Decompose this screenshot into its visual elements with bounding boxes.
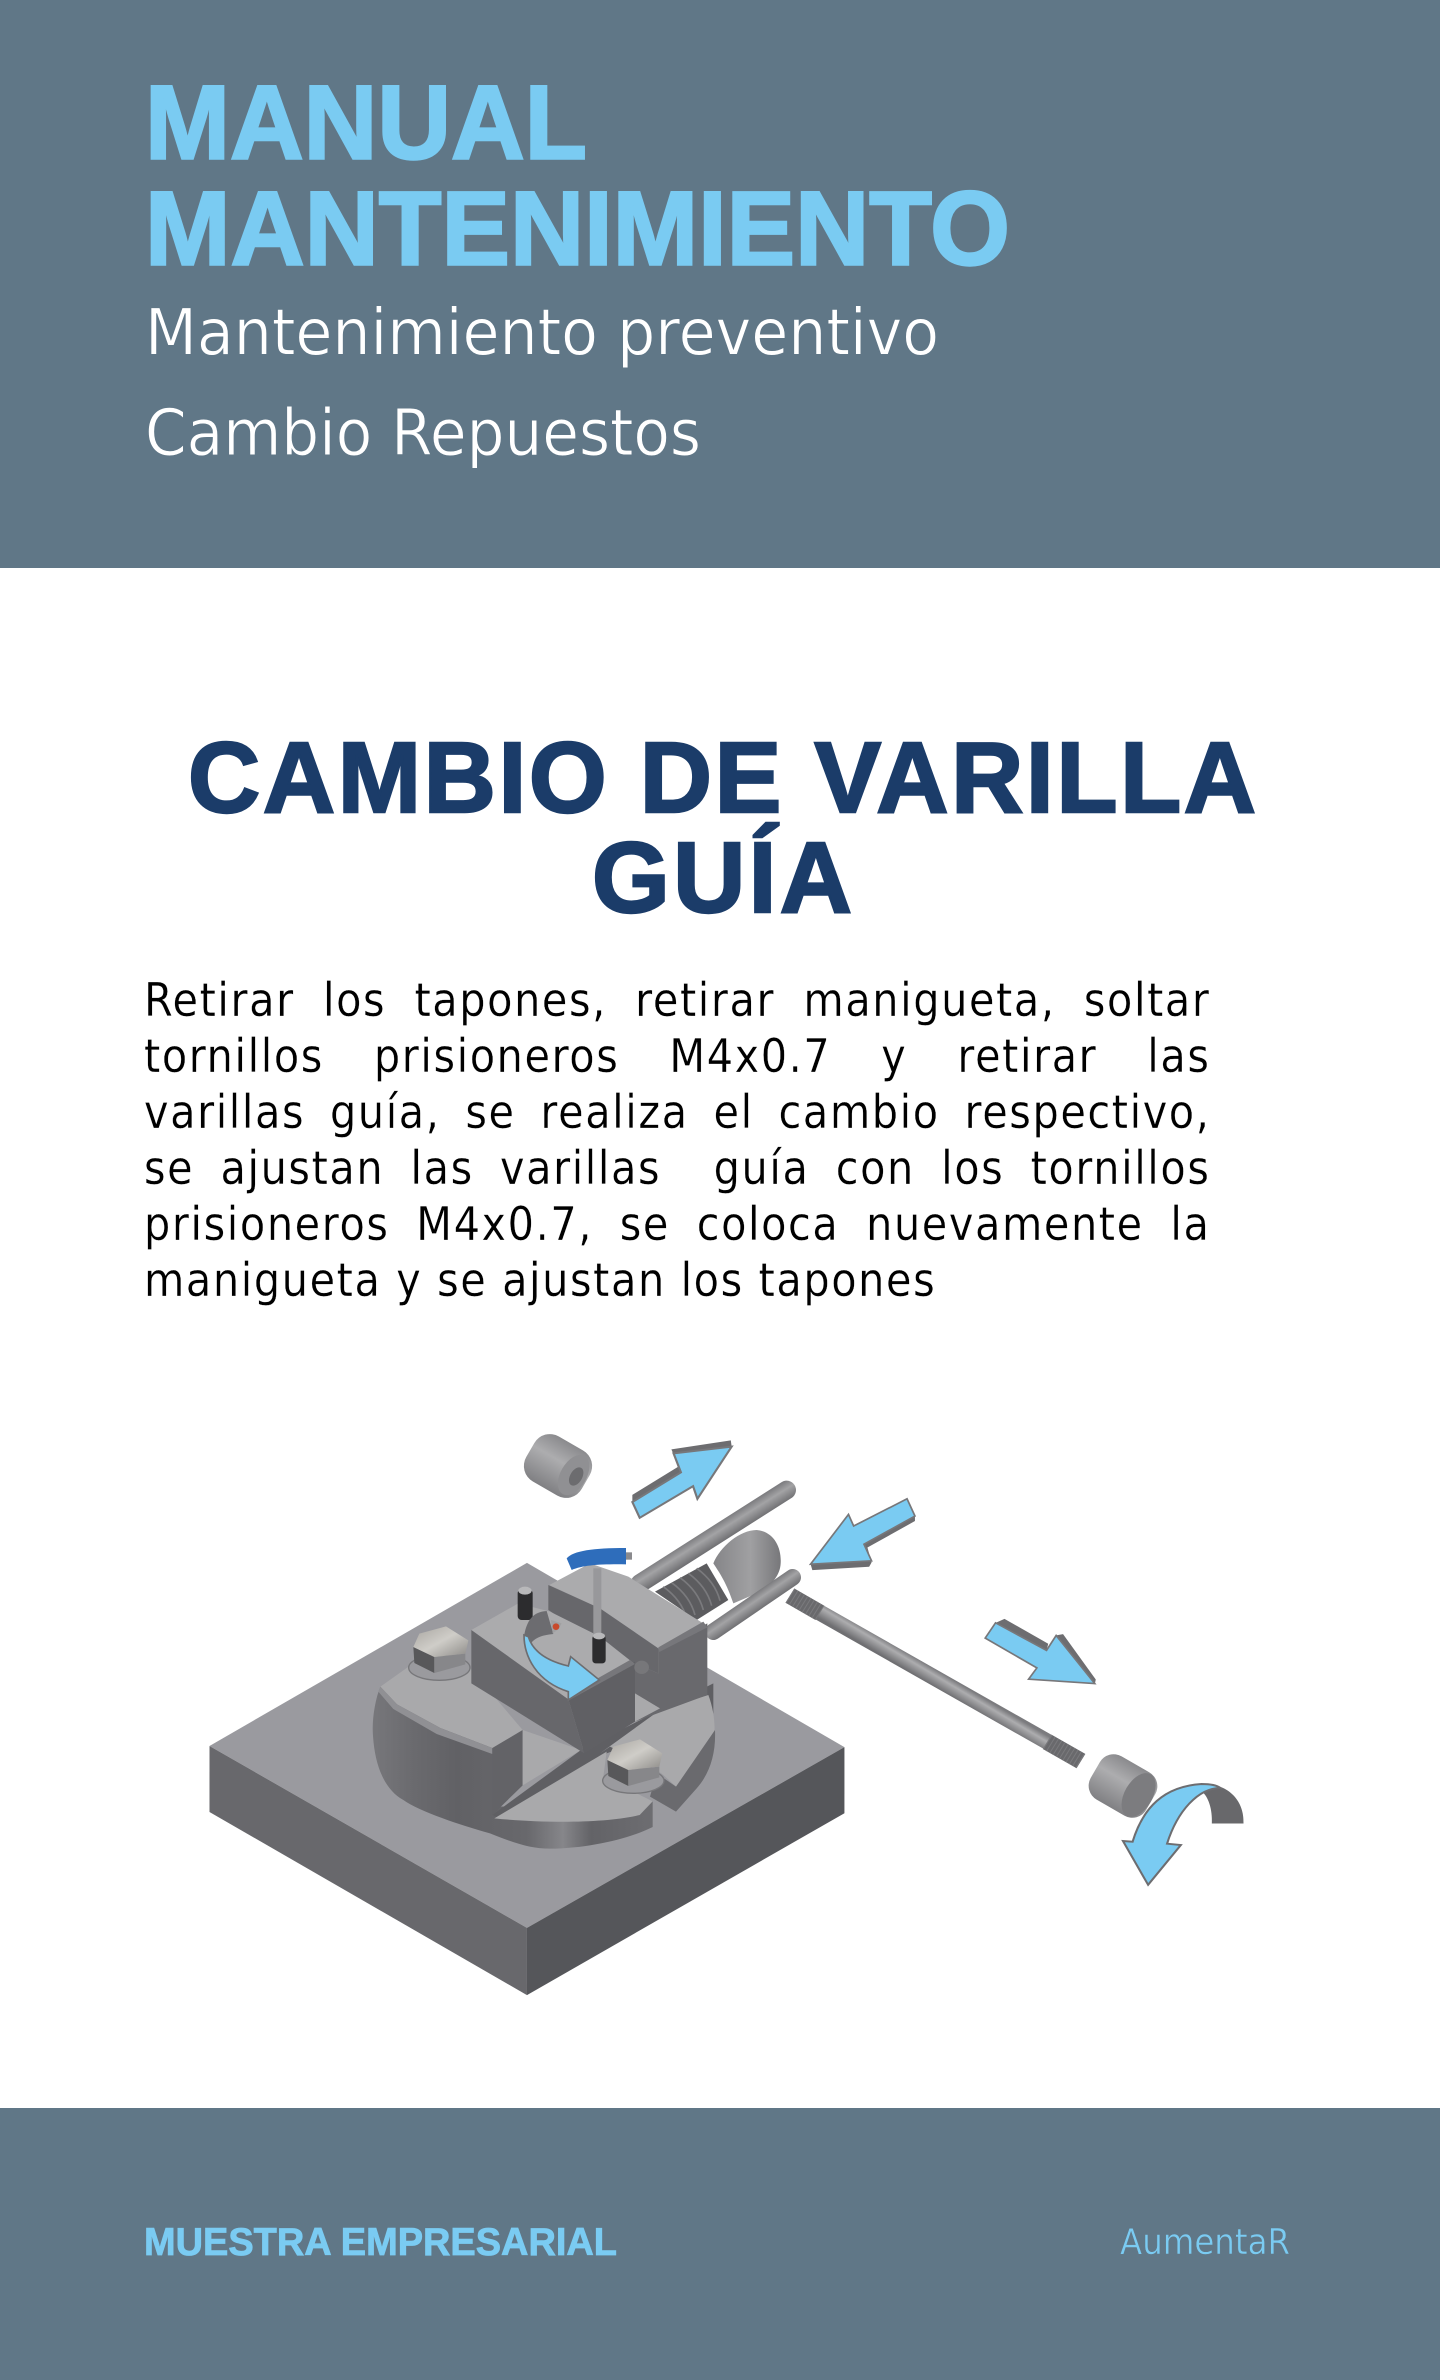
- nut: [713, 1530, 781, 1603]
- illustration: vise with guide rod: [209, 1427, 1244, 1995]
- section heading: [188, 722, 1256, 934]
- arrow: pointing outward: [985, 1619, 1096, 1685]
- threaded spindle: [655, 1563, 728, 1620]
- section heading: GUÍA: [592, 822, 852, 934]
- title: MANUAL: [145, 64, 587, 182]
- section heading: CAMBIO DE VARILLA: [188, 722, 1256, 834]
- body paragraph: Retirar los tapones, retirar manigueta, soltar: [144, 972, 1210, 1026]
- T-handle wrench: [567, 1548, 632, 1635]
- lower cap: [1083, 1748, 1163, 1824]
- fixed jaw: [548, 1563, 707, 1722]
- upper cap: [517, 1427, 599, 1505]
- long guide rod: [790, 1596, 1081, 1761]
- title: [145, 64, 1010, 288]
- bolt 1: [409, 1626, 470, 1680]
- body paragraph: manigueta y se ajustan los tapones: [144, 1252, 936, 1306]
- body paragraph: prisioneros M4x0.7, se coloca nuevamente la: [144, 1196, 1210, 1250]
- curved arrow: [1123, 1784, 1244, 1885]
- footer left label: MUESTRA EMPRESARIAL: [144, 2221, 617, 2264]
- vise assembly: [373, 1490, 793, 1849]
- right-hand arrows: [811, 1499, 1244, 1885]
- subtitle: [145, 296, 939, 471]
- moving jaw: [471, 1603, 649, 1753]
- subtitle: Cambio Repuestos: [145, 397, 701, 471]
- body paragraph: se ajustan las varillas guía con los tornillos: [144, 1140, 1210, 1194]
- arrow: pointing to vise: [811, 1499, 915, 1570]
- set screw right: [592, 1633, 606, 1663]
- rotation arrow: [524, 1611, 599, 1700]
- lower rod: [713, 1577, 793, 1632]
- subtitle: Mantenimiento preventivo: [145, 296, 939, 370]
- body paragraph: varillas guía, se realiza el cambio respectivo,: [144, 1084, 1210, 1138]
- footer panel: [0, 2108, 1440, 2380]
- body paragraph: tornillos prisioneros M4x0.7 y retirar las: [144, 1028, 1210, 1082]
- body paragraph: [144, 972, 1210, 1306]
- upper rod: [640, 1490, 787, 1583]
- base plate: [209, 1563, 844, 1995]
- header panel: [0, 0, 1440, 568]
- arrow: top: [632, 1440, 732, 1518]
- footer right label: AumentaR: [1120, 2222, 1290, 2263]
- bolt 2: [603, 1739, 664, 1793]
- title: MANTENIMIENTO: [145, 170, 1010, 288]
- set screw left: [518, 1587, 533, 1620]
- rotating base: [373, 1666, 715, 1849]
